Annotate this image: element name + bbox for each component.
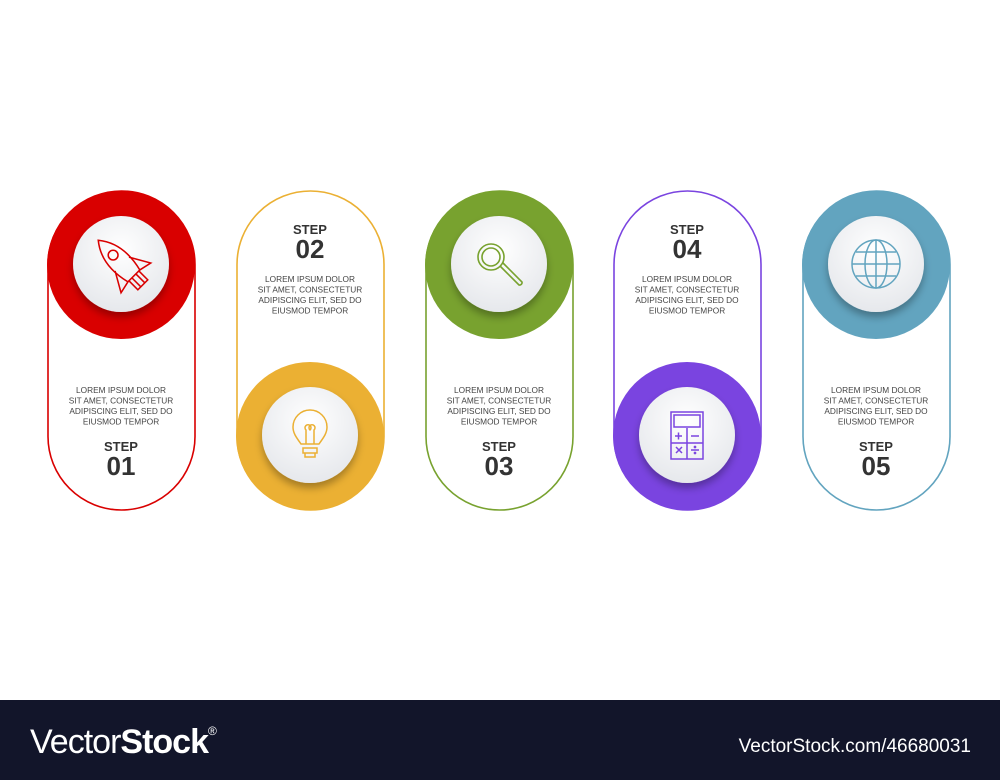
heading: step 02: 02 xyxy=(296,234,324,264)
footer bar xyxy=(0,700,1000,780)
heading: step 03: 03 xyxy=(485,451,513,481)
text: step 05 description: LOREM IPSUM DOLOR xyxy=(831,385,921,395)
icon: calculator xyxy=(671,412,703,459)
text: step 03 description: LOREM IPSUM DOLOR xyxy=(454,385,544,395)
panel: step 05 xyxy=(802,191,950,510)
text: step 02 description: SIT AMET, CONSECTETUR xyxy=(258,284,362,294)
text: step 05 description: EIUSMOD TEMPOR xyxy=(838,416,914,426)
text: step 05 description: ADIPISCING ELIT, SED DO xyxy=(824,406,928,416)
panel: step 01 xyxy=(47,191,195,510)
heading: step 02: STEP xyxy=(293,222,327,237)
heading: step 05: STEP xyxy=(859,439,893,454)
icon: rocket xyxy=(83,225,158,300)
text: step 02 description: ADIPISCING ELIT, SED DO xyxy=(258,295,362,305)
text: step 01 description: EIUSMOD TEMPOR xyxy=(83,416,159,426)
heading: step 05: 05 xyxy=(862,451,890,481)
text: step 04 description: ADIPISCING ELIT, SED DO xyxy=(635,295,739,305)
icon: magnifier xyxy=(478,244,522,285)
text: step 04 description: SIT AMET, CONSECTETUR xyxy=(635,284,739,294)
text: step 04 description: LOREM IPSUM DOLOR xyxy=(642,274,732,284)
text: step 03 description: EIUSMOD TEMPOR xyxy=(461,416,537,426)
text: step 03 description: SIT AMET, CONSECTETUR xyxy=(447,396,551,406)
text: step 02 description: LOREM IPSUM DOLOR xyxy=(265,274,355,284)
heading: step 04: STEP xyxy=(670,222,704,237)
footer logo: ® xyxy=(208,724,217,738)
text: step 05 description: SIT AMET, CONSECTETUR xyxy=(824,396,928,406)
panel: step 02 xyxy=(236,191,384,510)
text: step 03 description: ADIPISCING ELIT, SED DO xyxy=(447,406,551,416)
text: step 02 description: EIUSMOD TEMPOR xyxy=(272,306,348,316)
heading: step 01: 01 xyxy=(107,451,135,481)
text: step 01 description: LOREM IPSUM DOLOR xyxy=(76,385,166,395)
panel: step 04 xyxy=(613,191,761,510)
footer url: VectorStock.com/46680031 xyxy=(739,736,971,757)
icon: globe xyxy=(852,240,900,288)
panel: step 03 xyxy=(425,191,573,510)
text: step 04 description: EIUSMOD TEMPOR xyxy=(649,306,725,316)
icon: light bulb xyxy=(293,410,327,457)
heading: step 03: STEP xyxy=(482,439,516,454)
heading: step 01: STEP xyxy=(104,439,138,454)
footer logo: VectorStock xyxy=(30,723,208,761)
heading: step 04: 04 xyxy=(673,234,702,264)
text: step 01 description: ADIPISCING ELIT, SED DO xyxy=(69,406,173,416)
text: step 01 description: SIT AMET, CONSECTETUR xyxy=(69,396,173,406)
